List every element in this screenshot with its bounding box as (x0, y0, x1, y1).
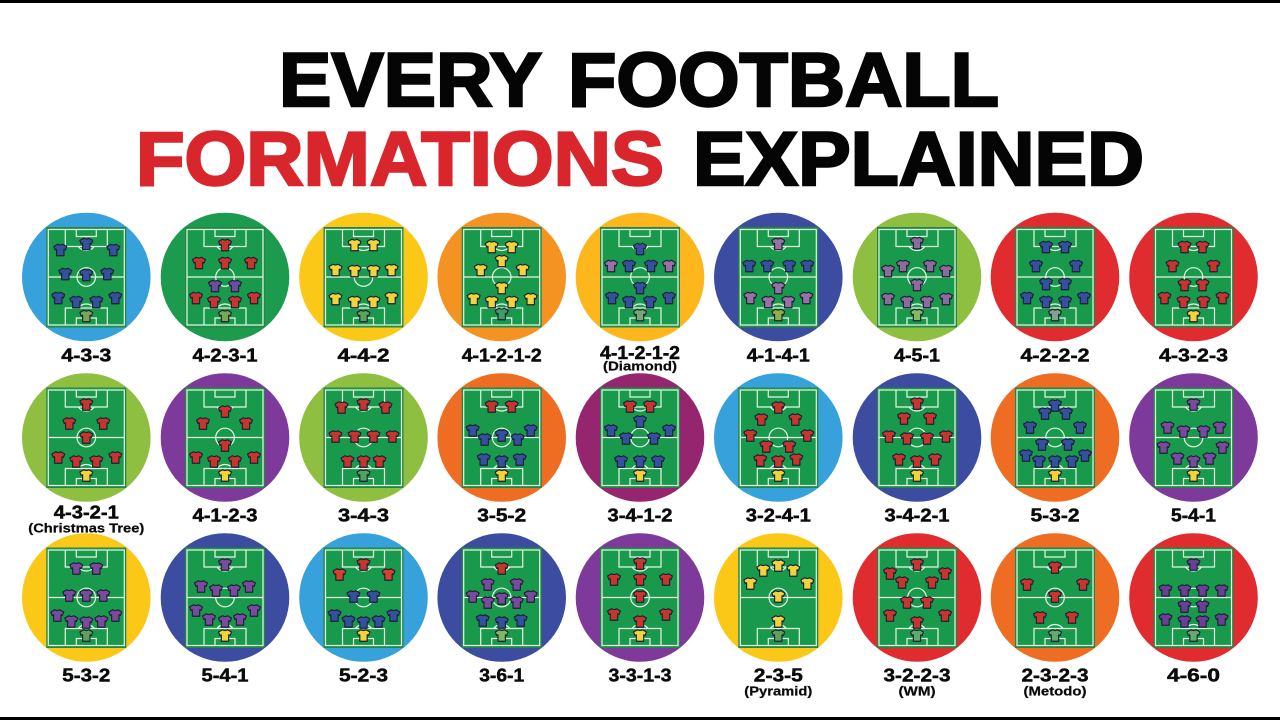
formation 4-3-2-1 christmas tree: 4-3-2-1 (54, 501, 119, 522)
formation 4-3-3: 4-3-3 (61, 345, 111, 366)
formation 2-3-5 pyramid: 2-3-5 (754, 664, 803, 686)
formation 3-4-2-1 (853, 373, 981, 526)
formation 4-1-2-1-2 diamond: (Diamond) (603, 359, 677, 374)
formation 4-6-0 (1129, 533, 1258, 686)
formation 3-2-2-3 WM: 3-2-2-3 (884, 664, 950, 686)
formation 3-2-4-1 (714, 373, 843, 526)
formation 3-5-2 (437, 373, 566, 526)
formation 5-2-3 (299, 533, 428, 686)
formation 4-5-1: 4-5-1 (894, 345, 940, 366)
formation 2-3-5 pyramid: (Pyramid) (744, 684, 812, 698)
formation 4-1-2-1-2 (437, 213, 566, 366)
formation 3-2-2-3 WM: (WM) (898, 684, 936, 698)
formation 4-1-2-1-2 diamond (576, 213, 704, 374)
title (136, 38, 1144, 202)
formation 5-3-2 orange: 5-3-2 (1030, 505, 1080, 526)
formation 4-6-0: 4-6-0 (1167, 665, 1220, 686)
title: FORMATIONS (136, 117, 664, 202)
formation 3-4-3 (299, 373, 428, 526)
formation 4-2-3-1 (161, 213, 289, 366)
formation 5-4-1 indigo: 5-4-1 (202, 665, 248, 686)
formation 3-6-1: 3-6-1 (479, 665, 524, 686)
formation 5-4-1 indigo (161, 533, 289, 686)
formation 4-3-2-1 christmas tree (22, 373, 151, 535)
formation 3-6-1 (437, 533, 566, 686)
formation 3-4-2-1: 3-4-2-1 (884, 505, 950, 526)
formation 2-3-2-3 metodo: 2-3-2-3 (1022, 664, 1088, 686)
formation 2-3-2-3 metodo (991, 533, 1119, 698)
title: EXPLAINED (693, 117, 1144, 202)
top bar (0, 0, 1280, 3)
formation 5-3-2 yellow (22, 533, 151, 686)
formation 4-2-2-2: 4-2-2-2 (1020, 345, 1090, 366)
title: EVERY (279, 38, 542, 123)
formation 4-4-2 (299, 213, 428, 366)
formation 3-4-1-2 (576, 373, 704, 526)
formation 3-3-1-3 (576, 533, 704, 686)
formation 3-2-2-3 WM (853, 533, 981, 698)
formation 4-2-3-1: 4-2-3-1 (192, 345, 258, 366)
formation 3-4-3: 3-4-3 (338, 505, 389, 526)
formation 4-1-2-3: 4-1-2-3 (192, 505, 258, 526)
formation 4-3-2-3 (1129, 213, 1258, 366)
formation 4-3-2-3: 4-3-2-3 (1159, 345, 1228, 366)
formation 2-3-2-3 metodo: (Metodo) (1024, 684, 1086, 698)
title: FOOTBALL (568, 38, 999, 123)
formation 4-2-2-2 (991, 213, 1119, 366)
formation 4-3-3 (22, 213, 151, 366)
formation 3-5-2: 3-5-2 (477, 505, 526, 526)
formation 3-3-1-3: 3-3-1-3 (608, 665, 672, 686)
formation 4-1-2-1-2: 4-1-2-1-2 (462, 345, 542, 366)
formation 5-3-2 yellow: 5-3-2 (62, 665, 110, 686)
formation 4-1-4-1: 4-1-4-1 (747, 345, 810, 366)
formation 4-3-2-1 christmas tree: (Christmas Tree) (28, 520, 144, 535)
formation 4-1-4-1 (714, 213, 843, 366)
formation 5-2-3: 5-2-3 (339, 665, 388, 686)
formation 3-4-1-2: 3-4-1-2 (608, 505, 672, 526)
formation 5-4-1 purple: 5-4-1 (1171, 505, 1216, 526)
formation 4-1-2-3 (161, 373, 289, 526)
formation 5-3-2 orange (991, 373, 1119, 526)
formation 4-5-1 (853, 213, 981, 366)
formation 3-2-4-1: 3-2-4-1 (746, 505, 811, 526)
bottom bar (0, 717, 1280, 720)
formation 5-4-1 purple (1129, 373, 1258, 526)
formation 2-3-5 pyramid (714, 533, 843, 698)
formation 4-1-2-1-2 diamond: 4-1-2-1-2 (600, 342, 680, 363)
formation 4-4-2: 4-4-2 (338, 345, 390, 366)
